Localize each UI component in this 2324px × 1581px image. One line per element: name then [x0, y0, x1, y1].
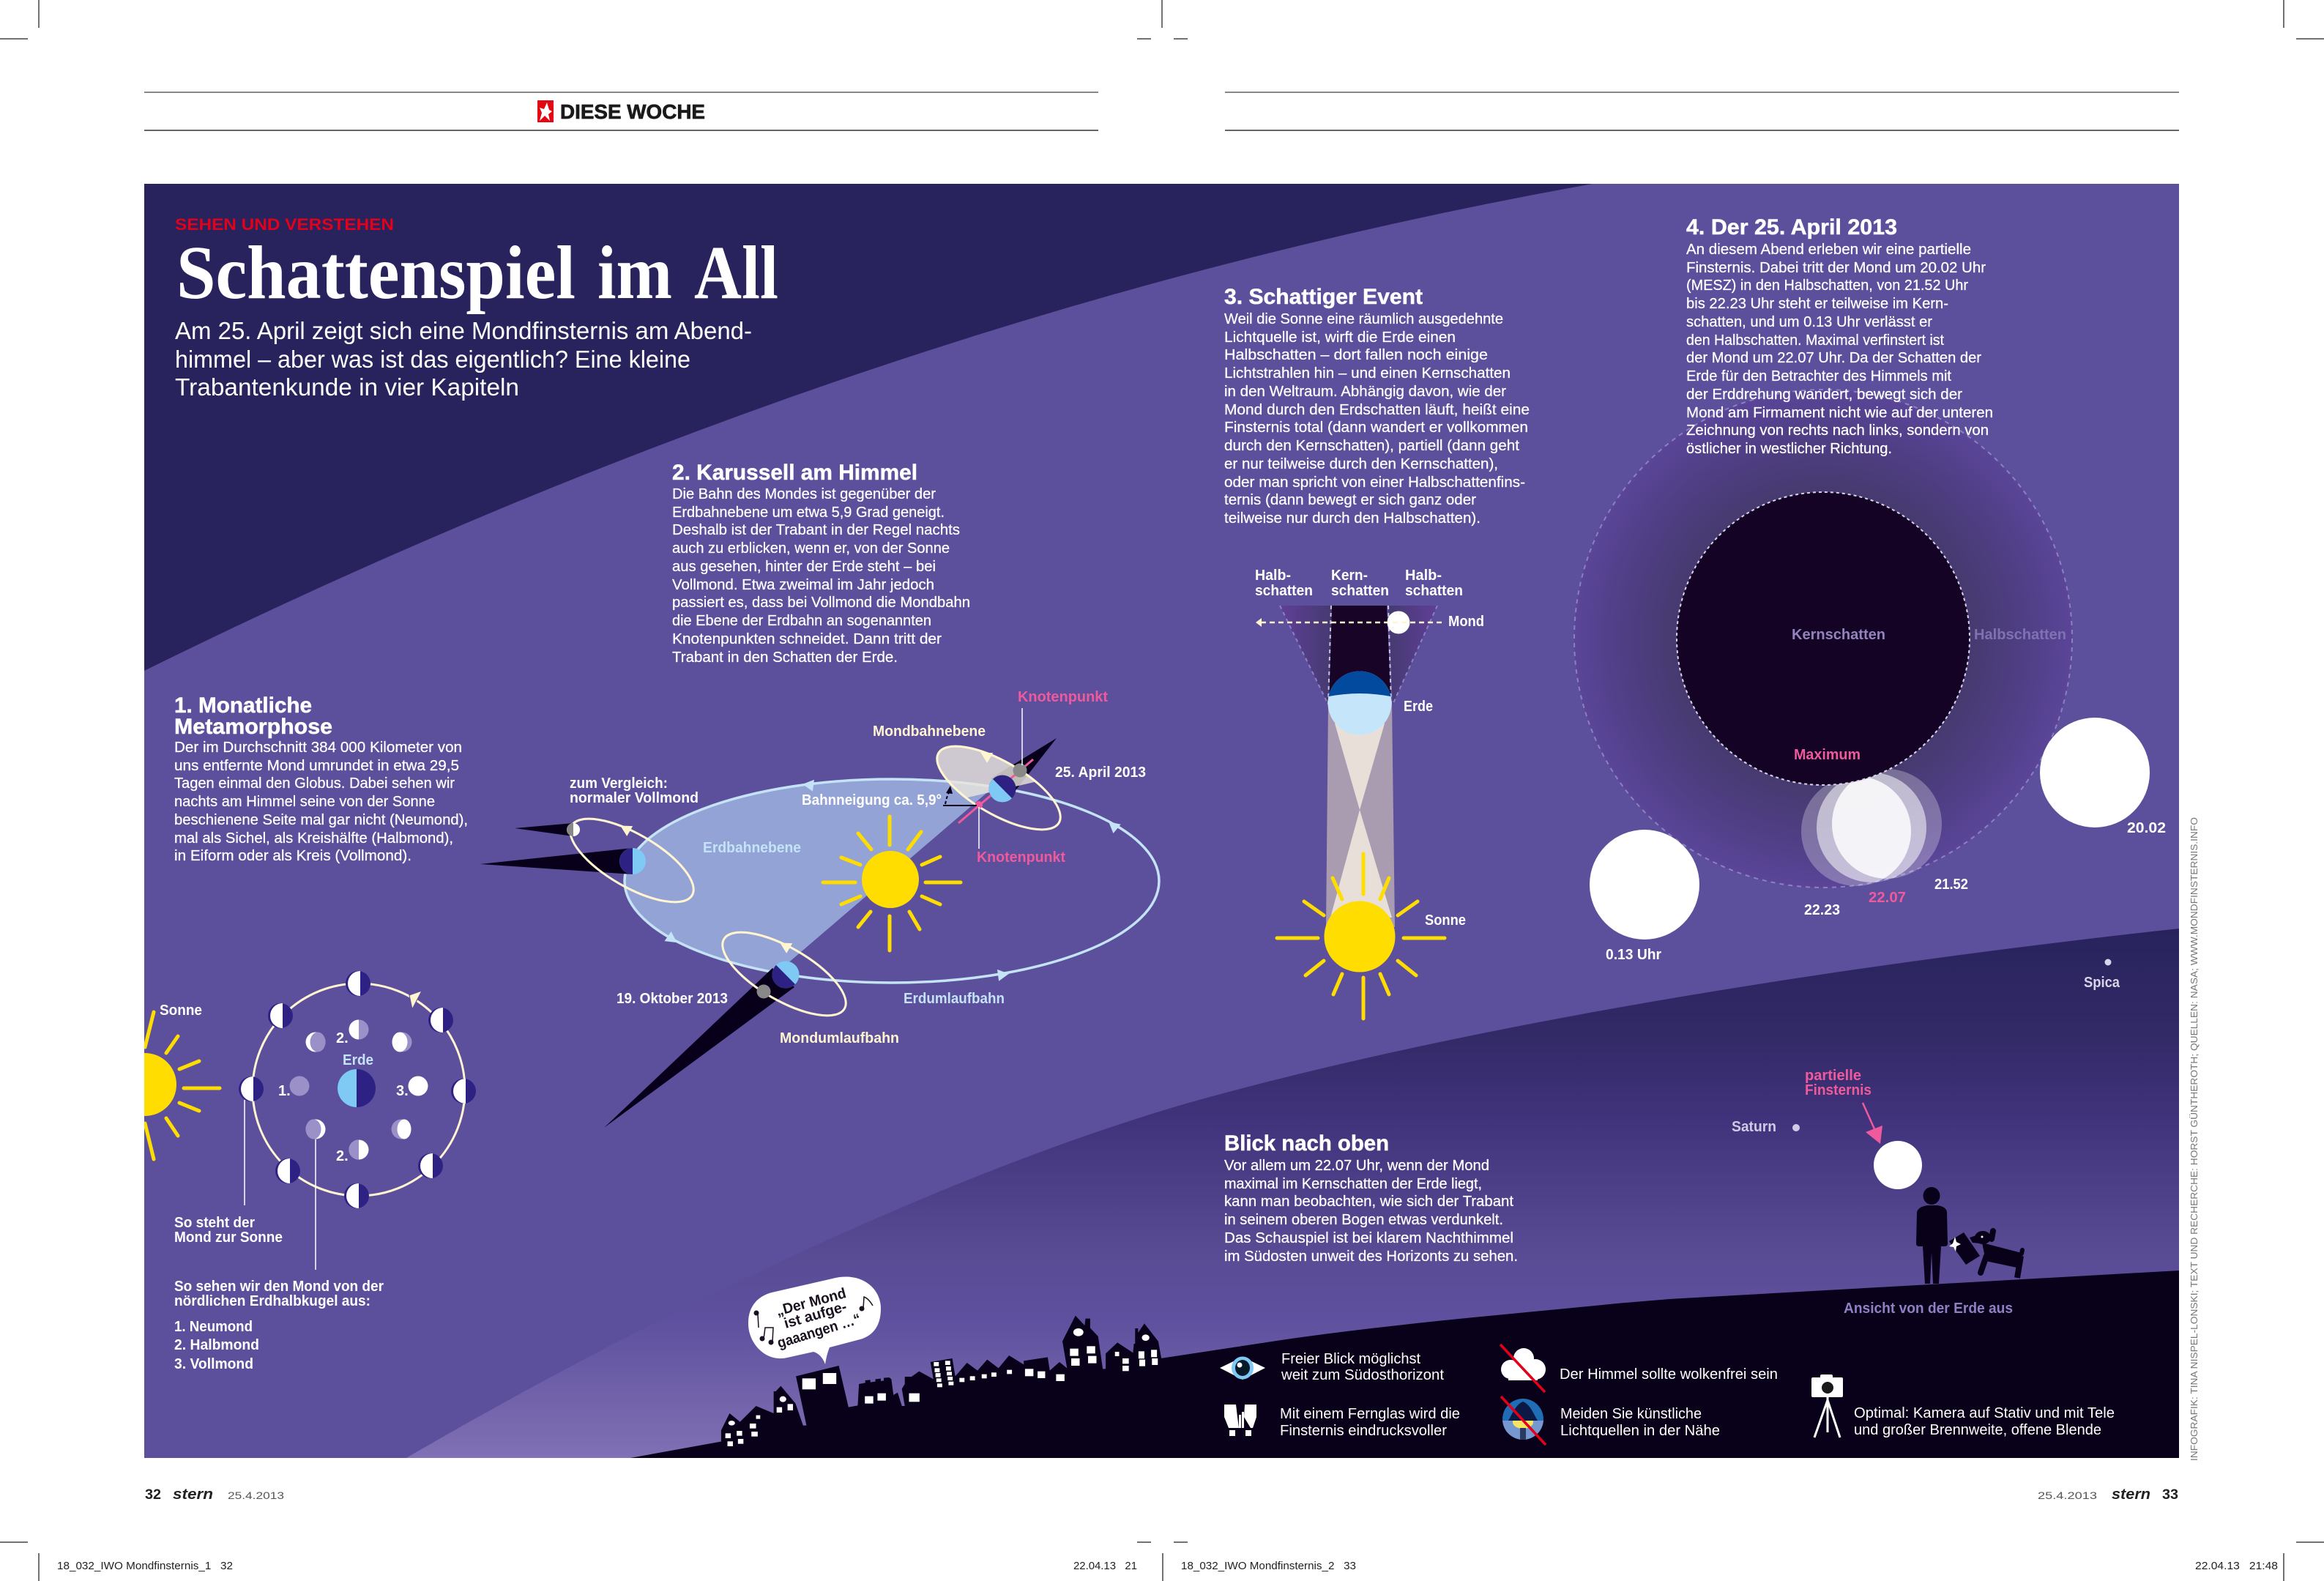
label: Spica [2084, 959, 2120, 991]
print slug: 22.04.13 21 [1073, 1560, 1137, 1572]
text block: 4. Der 25. April 2013: bis 22.23 Uhr steht er teilweise im Kern- [1686, 295, 1948, 312]
earth positions [619, 770, 1021, 994]
tip text: binoculars: Mit einem Fernglas wird die [1280, 1405, 1460, 1422]
shadow labels: schatten [1405, 583, 1463, 599]
text block: 1. Monatliche Metamorphose: Der im Durchschnitt 384 000 Kilometer von [174, 739, 462, 756]
icon: stern logo [537, 100, 554, 122]
icon: camera on tripod [1811, 1374, 1843, 1437]
text block: 2. Karussell am Himmel: Erdbahnebene um etwa 5,9 Grad geneigt. [672, 504, 945, 521]
phase notes [174, 1215, 384, 1372]
text block: 1. Monatliche Metamorphose: 1. Monatliche [174, 693, 312, 718]
moon [1387, 611, 1410, 634]
time labels: 0.13 Uhr [1606, 947, 1661, 963]
tip text: view: weit zum Südosthorizont [1281, 1366, 1444, 1383]
orbit arrow [409, 991, 422, 1009]
tip text: light sources [1560, 1405, 1720, 1439]
light beam [1326, 704, 1395, 927]
label: Halbschatten: Halbschatten [1974, 627, 2066, 643]
page footer left: stern [173, 1487, 213, 1503]
text block: 3. Schattiger Event: oder man spricht von einer Halbschattenfins- [1224, 474, 1525, 491]
text block: 3. Schattiger Event: Halbschatten – dort fallen noch einige [1224, 346, 1488, 363]
vertical credit: INFOGRAFIK: TINA NISPEL-LONSKI; TEXT UND RECHERCHE: HORST GÜNTHEROTH; QUELLEN: NASA; WWW.MONDFINSTERNIS.INFO [2189, 817, 2200, 1461]
text block: 3. Schattiger Event: ternis (dann bewegt er sich ganz oder [1224, 491, 1476, 508]
phase notes: 3. Vollmond [174, 1356, 253, 1372]
moon orbits [559, 730, 1072, 1032]
phase notes: nördlichen Erdhalbkugel aus: [174, 1293, 370, 1309]
text block: 2. Karussell am Himmel: die Ebene der Erdbahn an sogenannten [672, 612, 931, 629]
text block: 3. Schattiger Event: Mond durch den Erdschatten läuft, heißt eine [1224, 401, 1530, 418]
page footer right: 25.4.2013 [2038, 1489, 2097, 1501]
text block: 2. Karussell am Himmel: aus gesehen, hinter der Erde steht – bei [672, 558, 936, 575]
moons seen from earth [290, 1019, 428, 1160]
shadow labels: schatten [1255, 583, 1313, 599]
orbit labels: Bahnneigung ca. 5,9° [802, 792, 942, 808]
moon positions [567, 763, 1027, 999]
kicker: SEHEN UND VERSTEHEN [175, 215, 394, 234]
inclination angle marker [943, 786, 977, 806]
label: Ansicht von der Erde aus: Ansicht von der Erde aus [1844, 1301, 2013, 1317]
text block: 4. Der 25. April 2013: (MESZ) in den Halbschatten, von 21.52 Uhr [1686, 277, 1968, 294]
text block: Blick nach oben: Blick nach oben [1224, 1131, 1389, 1156]
text block: 1. Monatliche Metamorphose: uns entfernte Mond umrundet in etwa 29,5 [174, 757, 459, 774]
text block: 4. Der 25. April 2013: Finsternis. Dabei tritt der Mond um 20.02 Uhr [1686, 259, 1986, 276]
eclipse diagram [1574, 390, 2166, 963]
time labels [1606, 820, 2166, 963]
text block: 3. Schattiger Event: teilweise nur durch den Halbschatten). [1224, 510, 1481, 527]
text block: 3. Schattiger Event: Finsternis total (dann wandert er vollkommen [1224, 419, 1528, 436]
phase notes: So sehen wir den Mond von der [174, 1279, 384, 1295]
moon phases diagram [113, 971, 476, 1372]
person silhouette [1916, 1187, 1948, 1284]
text block: 2. Karussell am Himmel: Deshalb ist der Trabant in der Regel nachts [672, 521, 960, 538]
node line [958, 759, 1033, 823]
page header right [1225, 92, 2179, 131]
arrow to moon [1863, 1103, 1882, 1144]
title: Schattenspiel [176, 231, 576, 315]
text block: 2. Karussell am Himmel: Vollmond. Etwa zweimal im Jahr jedoch [672, 576, 934, 593]
phase numbers [278, 1030, 409, 1164]
label: Saturn [1732, 1119, 1800, 1135]
print slug: 18_032_IWO Mondfinsternis_1 32 [57, 1560, 233, 1572]
orbit arrows [664, 778, 1121, 981]
text block: Blick nach oben: Vor allem um 22.07 Uhr, wenn der Mond [1224, 1157, 1489, 1174]
phase numbers: 2. [336, 1148, 349, 1164]
label: partielle Finsternis: Finsternis [1805, 1082, 1872, 1098]
text block: 3. Schattiger Event: er nur teilweise durch den Kernschatten), [1224, 455, 1498, 472]
text block: 1. Monatliche Metamorphose: Tagen einmal den Globus. Dabei sehen wir [174, 775, 455, 792]
text block: 2. Karussell am Himmel [672, 461, 970, 666]
text block: 4. Der 25. April 2013: Erde für den Betrachter des Himmels mit [1686, 368, 1951, 384]
background panel [144, 184, 2179, 1458]
orbit labels [570, 689, 1146, 1046]
text block: 1. Monatliche Metamorphose: mal als Sichel, als Kreishälfte (Halbmond), [174, 830, 453, 847]
subtitle [175, 317, 752, 401]
text block: 3. Schattiger Event: Weil die Sonne eine räumlich ausgedehnte [1224, 310, 1503, 327]
tip text: binoculars: Finsternis eindrucksvoller [1280, 1422, 1447, 1439]
orbit labels: normaler Vollmond [570, 790, 699, 806]
phase notes: So steht der [174, 1215, 255, 1231]
leader lines [245, 1100, 316, 1270]
icon: music notes [754, 1297, 873, 1344]
label: Saturn: Saturn [1732, 1119, 1776, 1135]
dog with magazine [1949, 1231, 2022, 1278]
orbit labels: Mondbahnebene [873, 723, 986, 740]
title: im [597, 231, 672, 315]
text block: 2. Karussell am Himmel: passiert es, dass bei Vollmond die Mondbahn [672, 594, 970, 611]
phase numbers: 2. [336, 1030, 349, 1046]
earth view scene [1732, 959, 2120, 1317]
text block: 3. Schattiger Event: 3. Schattiger Event [1224, 285, 1423, 309]
text block: 4. Der 25. April 2013: An diesem Abend erleben wir eine partielle [1686, 241, 1971, 258]
moon 0.13 [1590, 830, 1699, 940]
page footer right: 33 [2162, 1487, 2178, 1503]
sun [144, 1011, 221, 1161]
orbit labels: zum Vergleich: [570, 775, 668, 792]
shadow labels: Mond [1448, 614, 1484, 630]
tip text: light sources: Meiden Sie künstliche [1560, 1405, 1702, 1422]
orbit labels: Erdbahnebene [703, 840, 801, 856]
orbit labels: Mondumlaufbahn [780, 1030, 899, 1046]
city skyline [721, 1316, 1161, 1457]
text block: Blick nach oben: kann man beobachten, wie sich der Trabant [1224, 1193, 1513, 1210]
text block: 2. Karussell am Himmel: auch zu erblicken, wenn er, von der Sonne [672, 540, 950, 557]
orbit labels: Knotenpunkt [1018, 689, 1108, 705]
penumbra disc [1574, 390, 2072, 888]
page footer left: 32 [145, 1487, 161, 1503]
text block: 4. Der 25. April 2013: der Mond um 22.07 Uhr. Da der Schatten der [1686, 349, 1981, 366]
tips row [1220, 1344, 2115, 1445]
text block: 2. Karussell am Himmel: Trabant in den Schatten der Erde. [672, 649, 898, 666]
phase numbers: 1. [278, 1083, 291, 1099]
text block: 4. Der 25. April 2013: Zeichnung von rechts nach links, sondern von [1686, 422, 1989, 439]
time labels: 22.23 [1804, 902, 1840, 918]
tip text: camera: Optimal: Kamera auf Stativ und mit Tele [1854, 1405, 2115, 1421]
tip text: view [1281, 1350, 1444, 1383]
text block: Blick nach oben: in seinem oberen Bogen etwas verdunkelt. [1224, 1211, 1503, 1228]
text block: 3. Schattiger Event: Lichtstrahlen hin – und einen Kernschatten [1224, 365, 1511, 382]
core light [1330, 723, 1392, 918]
shadow labels: Sonne [1425, 912, 1466, 929]
text block: Blick nach oben: maximal im Kernschatten der Erde liegt, [1224, 1175, 1482, 1192]
gradient horizon band [405, 929, 2179, 1459]
orbit labels: Knotenpunkt [977, 849, 1065, 866]
text block: 3. Schattiger Event [1224, 285, 1530, 527]
page header left [144, 92, 1098, 131]
text block: Blick nach oben [1224, 1131, 1518, 1265]
text block: Blick nach oben: im Südosten unweit des Horizonts zu sehen. [1224, 1248, 1518, 1265]
text block: Blick nach oben: Das Schauspiel ist bei klarem Nachthimmel [1224, 1230, 1513, 1246]
speech bubble [748, 1277, 881, 1364]
orbit diagram [480, 689, 1159, 1128]
umbra disc [1677, 492, 1970, 785]
node markers and lines [975, 708, 1022, 849]
shadow labels [1255, 568, 1484, 929]
text block: 4. Der 25. April 2013: Mond am Firmament nicht wie auf der unteren [1686, 404, 1993, 421]
icon: crossed cloud [1500, 1344, 1546, 1392]
text block: 1. Monatliche Metamorphose: nachts am Himmel seine von der Sonne [174, 793, 435, 810]
ground [630, 1271, 2179, 1459]
text block: 4. Der 25. April 2013: 4. Der 25. April 2013 [1686, 215, 1897, 239]
moon orbit plane fill [938, 747, 1035, 797]
text block: 3. Schattiger Event: Lichtquelle ist, wirft die Erde einen [1224, 329, 1456, 346]
label: partielle Finsternis: partielle [1805, 1068, 1861, 1084]
text block: 2. Karussell am Himmel: 2. Karussell am Himmel [672, 461, 917, 485]
label: Sonne: Sonne [160, 1002, 202, 1019]
shadow labels: Halb- [1255, 568, 1291, 584]
page footer left [145, 1487, 284, 1503]
orbit labels: 19. Oktober 2013 [617, 991, 728, 1007]
earth orbit [625, 779, 1159, 983]
subtitle: Trabantenkunde in vier Kapiteln [175, 373, 519, 401]
text block: 2. Karussell am Himmel: Knotenpunkten schneidet. Dann tritt der [672, 630, 942, 647]
shadow labels: Kern- [1331, 568, 1368, 584]
text block: 3. Schattiger Event: durch den Kernschatten), partiell (dann geht [1224, 437, 1519, 454]
label: partielle Finsternis [1805, 1068, 1872, 1098]
phase notes: Mond zur Sonne [174, 1230, 283, 1246]
speech bubble: ist aufge- [782, 1298, 849, 1332]
title block [175, 215, 778, 401]
text block: 2. Karussell am Himmel: Die Bahn des Mondes ist gegenüber der [672, 486, 936, 502]
moon orbit [253, 983, 465, 1196]
tip text: light sources: Lichtquellen in der Nähe [1560, 1422, 1720, 1439]
shadow diagram [1255, 568, 1484, 1019]
moon [1874, 1141, 1922, 1189]
time labels: 20.02 [2127, 820, 2166, 836]
time labels: 22.07 [1869, 890, 1906, 906]
dark sky wedge top left [144, 184, 1593, 671]
speech bubble: gaaangen …“ [775, 1311, 863, 1352]
moon 20.02 [2040, 718, 2150, 827]
icon: binoculars [1224, 1405, 1256, 1436]
sun [823, 816, 961, 951]
text block: 4. Der 25. April 2013: der Erddrehung wandert, bewegt sich der [1686, 386, 1962, 403]
phase numbers: 3. [396, 1083, 409, 1099]
earth orbit plane fill [625, 781, 988, 970]
sun [1277, 854, 1445, 1019]
time labels: 21.52 [1934, 877, 1968, 893]
label: Kernschatten: Kernschatten [1792, 627, 1885, 643]
subtitle: himmel – aber was ist das eigentlich? Eine kleine [175, 346, 690, 373]
moons seen from the sun [239, 971, 476, 1208]
label: Maximum: Maximum [1794, 747, 1861, 763]
tip text: camera [1854, 1405, 2115, 1438]
icon: eye [1220, 1356, 1265, 1380]
earth [1328, 671, 1391, 735]
shadow cones [480, 738, 1057, 1128]
text block: 4. Der 25. April 2013: den Halbschatten. Maximal verfinstert ist [1686, 332, 1944, 349]
orbit labels: Erdumlaufbahn [904, 991, 1005, 1007]
label: Spica: Spica [2084, 975, 2120, 991]
tip text: clouds: Der Himmel sollte wolkenfrei sein [1560, 1366, 1778, 1383]
text block: 1. Monatliche Metamorphose: Metamorphose [174, 715, 332, 739]
icon: crossed street lamp [1501, 1396, 1546, 1445]
shadow labels: Erde [1404, 699, 1433, 715]
speech bubble: „Der Mond [775, 1285, 848, 1320]
shadow labels: Halb- [1405, 568, 1442, 584]
text block: 1. Monatliche Metamorphose: in Eiform oder als Kreis (Vollmond). [174, 847, 411, 864]
earth [338, 1069, 376, 1107]
orbit labels: 25. April 2013 [1055, 765, 1146, 781]
moon path arrow [1256, 618, 1445, 627]
print slug [57, 1560, 2278, 1572]
subtitle: Am 25. April zeigt sich eine Mondfinsternis am Abend- [175, 317, 752, 344]
print slug: 18_032_IWO Mondfinsternis_2 33 [1181, 1560, 1356, 1572]
text block: 3. Schattiger Event: in den Weltraum. Abhängig davon, wie der [1224, 383, 1506, 400]
tip text: camera: und großer Brennweite, offene Blende [1854, 1421, 2101, 1438]
title: All [694, 231, 778, 315]
tip text: binoculars [1280, 1405, 1460, 1439]
phase numbers: Erde [343, 1052, 373, 1068]
tip text: view: Freier Blick möglichst [1281, 1350, 1420, 1367]
section label: DIESE WOCHE [560, 100, 705, 123]
shadow labels: schatten [1331, 583, 1389, 599]
page footer right [2038, 1487, 2178, 1503]
phase notes: 1. Neumond [174, 1319, 253, 1335]
text block: 4. Der 25. April 2013 [1686, 215, 1993, 457]
penumbra wedges [1280, 606, 1437, 704]
eclipse moon positions 21.52 22.07 22.23 [1801, 769, 1942, 886]
page footer left: 25.4.2013 [228, 1489, 284, 1501]
umbra column [1329, 606, 1391, 703]
text block: 4. Der 25. April 2013: schatten, und um 0.13 Uhr verlässt er [1686, 313, 1932, 330]
page footer right: stern [2112, 1487, 2150, 1503]
text block: 1. Monatliche Metamorphose: beschienene Seite mal gar nicht (Neumond), [174, 811, 468, 828]
print slug: 22.04.13 21:48 [2195, 1560, 2278, 1572]
text block: 4. Der 25. April 2013: östlicher in westlicher Richtung. [1686, 440, 1892, 457]
text block: 1. Monatliche Metamorphose [174, 693, 468, 864]
phase notes: 2. Halbmond [174, 1337, 259, 1353]
